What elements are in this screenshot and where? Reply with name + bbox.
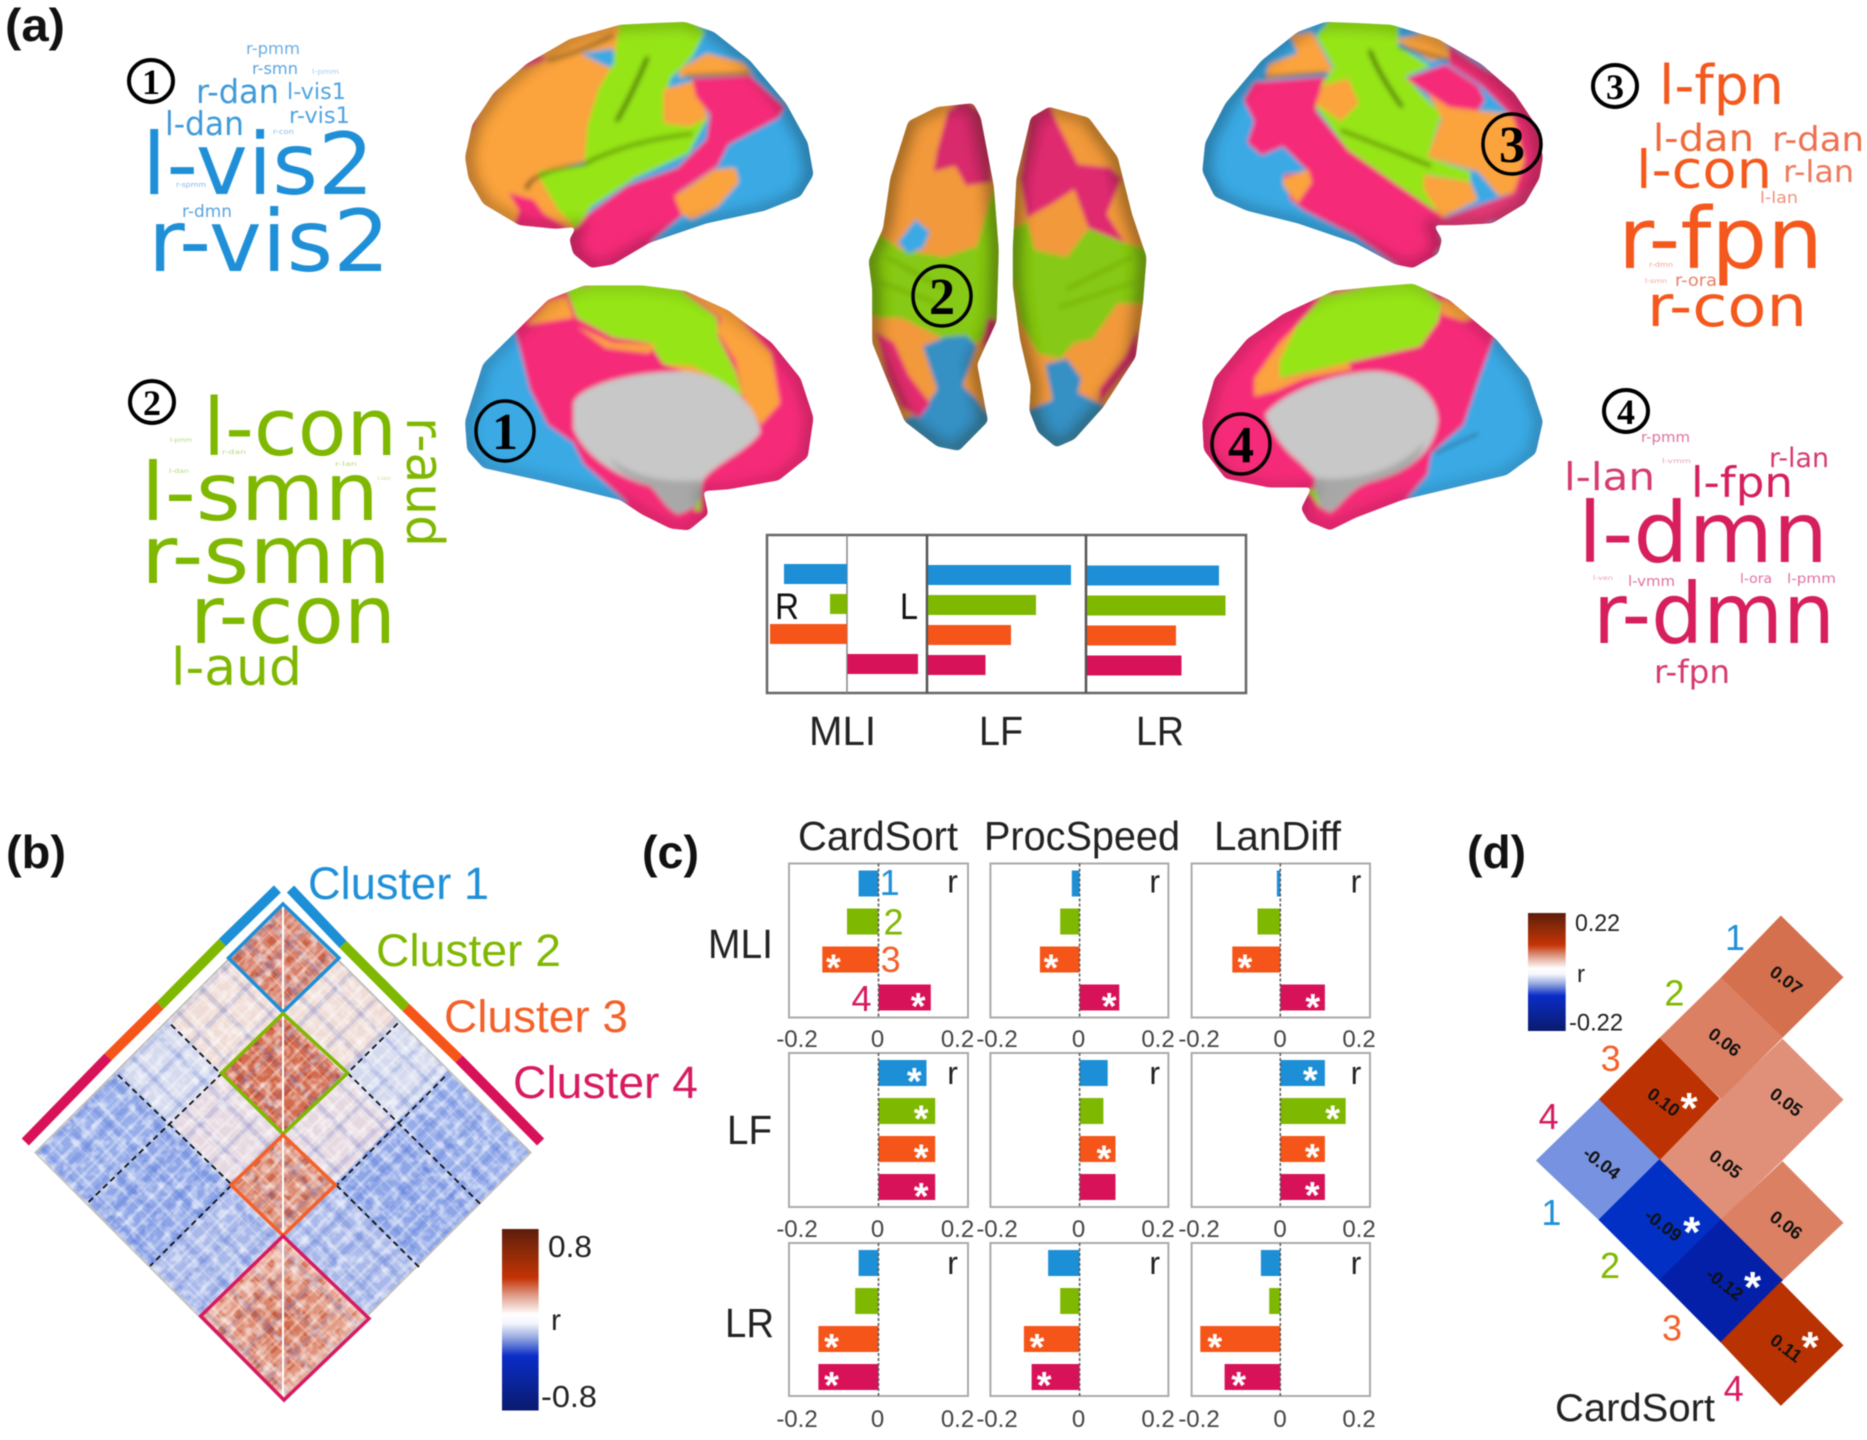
panel: word cloud cluster 3: r-fpn xyxy=(1618,190,1823,289)
panel: word cloud cluster 2: l-lan xyxy=(377,476,391,482)
axis tick labels for bar charts: 0.2 xyxy=(1342,1026,1376,1053)
brain: left medial view xyxy=(1202,283,1544,530)
cluster 3 label: Cluster 3 xyxy=(444,991,628,1042)
heatmap title: CardSort xyxy=(1555,1387,1715,1430)
brain: right medial view xyxy=(464,284,814,531)
panel: word cloud cluster 4: l-dmn xyxy=(1578,484,1828,582)
panel: correlation matrix diamond xyxy=(21,884,545,1403)
chart: MLI CardSort: r xyxy=(947,864,958,900)
axis tick labels for bar charts: 0.2 xyxy=(1141,1216,1175,1243)
panel: word cloud cluster 3: r-dan xyxy=(1772,120,1864,160)
column title ProcSpeed: ProcSpeed xyxy=(984,813,1180,859)
panel: word cloud cluster 2: l-pmm xyxy=(170,437,192,444)
panel: word cloud cluster 2: l-aud xyxy=(171,638,302,698)
panel: word cloud cluster 2: r-dan xyxy=(222,449,246,456)
panel: word cloud cluster 1: l-vis1 xyxy=(287,80,346,105)
legend: matrix colorbar xyxy=(502,1229,597,1414)
callout 2 on brain xyxy=(913,266,971,326)
heatmap axis numbers: 1 xyxy=(1541,1192,1561,1233)
cluster 4 label: Cluster 4 xyxy=(513,1057,698,1108)
heatmap values: 0.05 xyxy=(1766,1084,1806,1121)
axis tick labels for bar charts: 0 xyxy=(1072,1026,1085,1053)
panel label (a): (a) xyxy=(5,0,65,51)
panel label (b): (b) xyxy=(6,826,66,878)
axis tick labels for bar charts: -0.2 xyxy=(776,1026,818,1053)
bar chart: MLI LF LR summary: MLI xyxy=(809,708,876,754)
heatmap values: 0.06 xyxy=(1705,1024,1745,1061)
cluster 1 number badge xyxy=(129,60,173,102)
chart: LF ProcSpeed xyxy=(990,1053,1168,1207)
axis tick labels for bar charts: 0 xyxy=(1072,1406,1085,1433)
column title CardSort: CardSort xyxy=(798,813,959,859)
axis tick labels for bar charts: 0 xyxy=(871,1026,884,1053)
axis tick labels for bar charts: 0 xyxy=(1072,1216,1085,1243)
chart: MLI CardSort: * xyxy=(911,986,926,1028)
column title LanDiff: LanDiff xyxy=(1214,813,1342,859)
heatmap values: 0.06 xyxy=(1766,1207,1806,1244)
heatmap values: -0.09 xyxy=(1641,1205,1686,1246)
heatmap axis numbers: 1 xyxy=(1725,917,1745,958)
significance stars: * xyxy=(1744,1263,1762,1312)
panel: word cloud cluster 1 xyxy=(129,39,390,292)
chart: LR LanDiff: * xyxy=(1207,1327,1222,1369)
panel: word cloud cluster 3: r-con xyxy=(1647,274,1807,340)
legend: matrix colorbar: -0.8 xyxy=(541,1379,597,1414)
brain surface views xyxy=(440,0,1557,536)
callout 2 on brain: 2 xyxy=(929,269,955,326)
chart: MLI ProcSpeed: * xyxy=(1102,986,1117,1028)
panel: word cloud cluster 1: r-dan xyxy=(196,72,279,111)
heatmap values: -0.12 xyxy=(1702,1264,1747,1305)
panel: word cloud cluster 4: l-fpn xyxy=(1691,458,1793,507)
chart: LF CardSort: r xyxy=(947,1055,958,1091)
panel: word cloud cluster 3: r-lan xyxy=(1783,155,1854,190)
legend: CardSort colorbar: 0.22 xyxy=(1575,910,1620,937)
heatmap values: 0.11 xyxy=(1766,1330,1806,1366)
callout 1 on brain xyxy=(476,401,534,461)
panel: word cloud cluster 4: r-fpn xyxy=(1654,653,1730,691)
bar chart: MLI LF LR summary: LF xyxy=(979,708,1023,754)
panel label (c): (c) xyxy=(642,826,699,878)
chart: MLI CardSort: * xyxy=(826,948,841,990)
axis tick labels for bar charts: -0.2 xyxy=(776,1406,818,1433)
axis tick labels for bar charts: -0.2 xyxy=(976,1406,1018,1433)
chart: LR CardSort: r xyxy=(947,1245,958,1281)
chart: LR ProcSpeed: r xyxy=(1149,1245,1160,1281)
row label LR: LR xyxy=(725,1300,774,1346)
panel: word cloud cluster 2: l-con xyxy=(203,382,397,474)
panel: word cloud cluster 1: r-con xyxy=(273,128,294,136)
panel: word cloud cluster 3: l-dan xyxy=(1653,117,1754,160)
bar chart: MLI LF LR summary xyxy=(767,535,1246,754)
off-diagonal blocks xyxy=(36,959,530,1318)
axis tick labels for bar charts: -0.2 xyxy=(1178,1406,1220,1433)
panel: word cloud cluster 1: r-smn xyxy=(252,59,298,78)
chart: MLI CardSort: 2 xyxy=(883,902,904,942)
significance stars xyxy=(1680,1084,1819,1372)
callout 3 on brain xyxy=(1483,114,1541,174)
chart: LR CardSort xyxy=(789,1243,968,1407)
panel: word cloud cluster 4: l-ven xyxy=(1593,575,1613,582)
panel: word cloud cluster 4: l-pmm xyxy=(1787,572,1836,587)
axis tick labels for bar charts: 0.2 xyxy=(941,1216,974,1243)
chart: LF LanDiff: r xyxy=(1351,1055,1362,1091)
panel label (d): (d) xyxy=(1467,826,1526,878)
legend: CardSort colorbar xyxy=(1528,910,1623,1036)
row label MLI: MLI xyxy=(708,921,773,967)
callout 3 on brain: 3 xyxy=(1499,117,1525,174)
panel: word cloud cluster 1: r-dmn xyxy=(182,202,232,222)
cluster 2 number badge xyxy=(130,381,174,423)
heatmap axis numbers: 2 xyxy=(1600,1245,1620,1286)
cluster 3 number badge xyxy=(1593,65,1637,107)
cluster 1 number badge: 1 xyxy=(142,62,160,102)
axis tick labels for bar charts: -0.2 xyxy=(776,1216,818,1243)
legend: matrix colorbar: 0.8 xyxy=(548,1229,592,1264)
panel: word cloud cluster 3: l-fpn xyxy=(1659,54,1784,117)
axis tick labels for bar charts: 0.2 xyxy=(941,1026,974,1053)
chart: LF LanDiff: * xyxy=(1305,1175,1320,1217)
chart: LF LanDiff: * xyxy=(1325,1099,1340,1141)
chart: LF CardSort: * xyxy=(914,1099,929,1141)
chart: LR CardSort: * xyxy=(824,1327,839,1369)
panel: word cloud cluster 1: r-spmm xyxy=(176,181,206,189)
panel: word cloud cluster 1: r-vis1 xyxy=(289,104,350,129)
axis tick labels for bar charts: 0 xyxy=(1273,1406,1287,1433)
panel: word cloud cluster 4: r-dmn xyxy=(1593,565,1835,663)
callout 4 on brain xyxy=(1212,414,1270,474)
chart: LF CardSort: * xyxy=(914,1138,929,1180)
panel: word cloud cluster 2: r-smn xyxy=(141,509,391,602)
axis tick labels for bar charts: 0.2 xyxy=(1141,1026,1175,1053)
axis tick labels for bar charts: -0.2 xyxy=(1178,1216,1220,1243)
panel: word cloud cluster 1: r-pmm xyxy=(246,39,300,58)
panel: word cloud cluster 2: l-smn xyxy=(141,446,379,539)
heatmap values: 0.05 xyxy=(1706,1146,1746,1183)
significance stars: * xyxy=(1801,1323,1819,1372)
cluster outline boxes xyxy=(201,904,369,1400)
cluster 3 number badge: 3 xyxy=(1606,67,1624,107)
significance stars: * xyxy=(1683,1208,1701,1257)
chart: LF LanDiff: * xyxy=(1303,1060,1318,1102)
cluster 4 number badge xyxy=(1604,390,1648,432)
panel: word cloud cluster 2: r-lan xyxy=(335,461,357,468)
heatmap axis numbers: 2 xyxy=(1664,973,1684,1014)
bar chart: MLI LF LR summary: L xyxy=(900,586,918,627)
cluster 2 label: Cluster 2 xyxy=(376,925,561,976)
chart: LR ProcSpeed: * xyxy=(1030,1327,1045,1369)
chart: MLI CardSort: 1 xyxy=(880,862,900,903)
axis tick labels for bar charts: -0.2 xyxy=(976,1026,1018,1053)
panel: word cloud cluster 4 xyxy=(1564,390,1836,691)
axis tick labels for bar charts: 0.2 xyxy=(1342,1216,1376,1243)
chart: LF LanDiff: * xyxy=(1305,1137,1320,1179)
chart: MLI ProcSpeed: r xyxy=(1149,864,1160,900)
heatmap values: 0.10 xyxy=(1644,1084,1684,1121)
bar chart: MLI LF LR summary: R xyxy=(775,586,799,627)
heatmap axis numbers: 4 xyxy=(1724,1368,1744,1409)
panel: word cloud cluster 1: l-vis2 xyxy=(142,115,374,215)
heatmap: cluster pair correlations xyxy=(1536,916,1843,1405)
chart: LR LanDiff: * xyxy=(1231,1365,1246,1407)
axis tick labels for bar charts: 0 xyxy=(1273,1026,1287,1053)
dashed block boundaries xyxy=(88,1023,481,1268)
panel: word cloud cluster 4: l-vmm xyxy=(1662,458,1691,465)
chart: LF ProcSpeed: r xyxy=(1149,1055,1160,1091)
panel: word cloud cluster 4: l-vmm xyxy=(1628,574,1675,590)
axis tick labels for bar charts: 0.2 xyxy=(1342,1406,1376,1433)
panel: word cloud cluster 3: l-con xyxy=(1636,140,1772,201)
chart: MLI LanDiff: * xyxy=(1238,948,1253,990)
axis tick labels for bar charts: 0.2 xyxy=(941,1406,974,1433)
heatmap values: 0.07 xyxy=(1766,962,1806,999)
cluster 1 label: Cluster 1 xyxy=(308,858,489,909)
heatmap values: -0.04 xyxy=(1579,1143,1624,1184)
chart: LF LanDiff xyxy=(1192,1053,1370,1217)
panel: word cloud cluster 2 xyxy=(130,381,454,698)
diagonal cluster blocks xyxy=(200,905,366,1400)
heatmap axis numbers: 3 xyxy=(1601,1038,1621,1079)
chart: LR LanDiff: r xyxy=(1351,1245,1362,1281)
legend: CardSort colorbar: -0.22 xyxy=(1569,1010,1623,1036)
heatmap cells xyxy=(1536,916,1843,1405)
callout 4 on brain: 4 xyxy=(1228,417,1254,474)
chart: MLI CardSort: 3 xyxy=(881,939,901,980)
panel: word cloud cluster 3: r-ora xyxy=(1675,271,1717,291)
chart: LF CardSort: * xyxy=(914,1176,929,1218)
panel: word cloud cluster 1: l-dan xyxy=(165,104,244,143)
chart: LF CardSort xyxy=(789,1053,968,1218)
heatmap axis numbers: 3 xyxy=(1662,1308,1682,1349)
cluster 4 number badge: 4 xyxy=(1617,392,1635,432)
axis tick labels for bar charts xyxy=(776,1026,1376,1433)
chart: LF ProcSpeed: * xyxy=(1097,1138,1112,1180)
axis tick labels for bar charts: 0 xyxy=(871,1216,884,1243)
axis tick labels for bar charts: 0 xyxy=(1273,1216,1287,1243)
panel: word cloud cluster 3: l-smn xyxy=(1645,278,1667,285)
panel: word cloud cluster 4: r-lan xyxy=(1769,443,1829,474)
legend: CardSort colorbar: r xyxy=(1577,961,1585,988)
panel: word cloud cluster 2: r-con xyxy=(190,569,396,662)
significance stars: * xyxy=(1680,1084,1698,1133)
axis tick labels for bar charts: -0.2 xyxy=(1178,1026,1220,1053)
panel: word cloud cluster 4: l-ora xyxy=(1740,572,1772,587)
row label LF: LF xyxy=(727,1107,772,1153)
brain: right lateral view xyxy=(464,21,814,268)
chart: MLI LanDiff xyxy=(1192,864,1370,1029)
panel: word cloud cluster 1: r-vis2 xyxy=(148,192,390,292)
cluster color strips xyxy=(25,889,541,1142)
axis tick labels for bar charts: 0 xyxy=(871,1406,884,1433)
callout 1 on brain: 1 xyxy=(492,404,518,461)
brain: left lateral view xyxy=(1202,21,1544,268)
chart: LR CardSort: * xyxy=(824,1365,839,1407)
chart: LF CardSort: * xyxy=(907,1061,922,1103)
panel: word cloud cluster 4: r-pmm xyxy=(1641,430,1690,446)
brain: ventral view left hemisphere xyxy=(1012,106,1148,448)
panel: word cloud cluster 3: r-dmn xyxy=(1649,261,1673,269)
chart: MLI LanDiff: r xyxy=(1351,864,1362,900)
bar chart: MLI LF LR summary: LR xyxy=(1136,708,1184,754)
brain: ventral view right hemisphere xyxy=(868,102,1000,451)
panel: word cloud cluster 3: l-lan xyxy=(1760,188,1798,207)
cluster 2 number badge: 2 xyxy=(143,383,161,423)
heatmap values xyxy=(1579,962,1806,1366)
heatmap axis numbers: 4 xyxy=(1539,1096,1559,1137)
panel: word cloud cluster 1: l-pmm xyxy=(312,68,339,76)
chart: MLI ProcSpeed: * xyxy=(1044,948,1059,990)
panel: word cloud cluster 4: l-lan xyxy=(1564,455,1655,499)
heatmap axis numbers xyxy=(1539,917,1745,1409)
panel: word cloud cluster 2: l-dan xyxy=(169,468,189,475)
chart: MLI CardSort: 4 xyxy=(851,978,872,1019)
axis tick labels for bar charts: -0.2 xyxy=(976,1216,1018,1243)
panel: word cloud cluster 2: r-aud xyxy=(394,417,454,547)
chart: LR ProcSpeed: * xyxy=(1037,1365,1052,1407)
legend: matrix colorbar: r xyxy=(551,1304,561,1337)
chart: LR LanDiff xyxy=(1192,1243,1370,1407)
axis tick labels for bar charts: 0.2 xyxy=(1141,1406,1175,1433)
chart: LR ProcSpeed xyxy=(990,1243,1168,1407)
chart: MLI ProcSpeed xyxy=(990,864,1168,1028)
chart: MLI CardSort xyxy=(789,862,968,1028)
panel: word cloud cluster 3 xyxy=(1593,54,1864,340)
chart: MLI LanDiff: * xyxy=(1305,987,1320,1029)
